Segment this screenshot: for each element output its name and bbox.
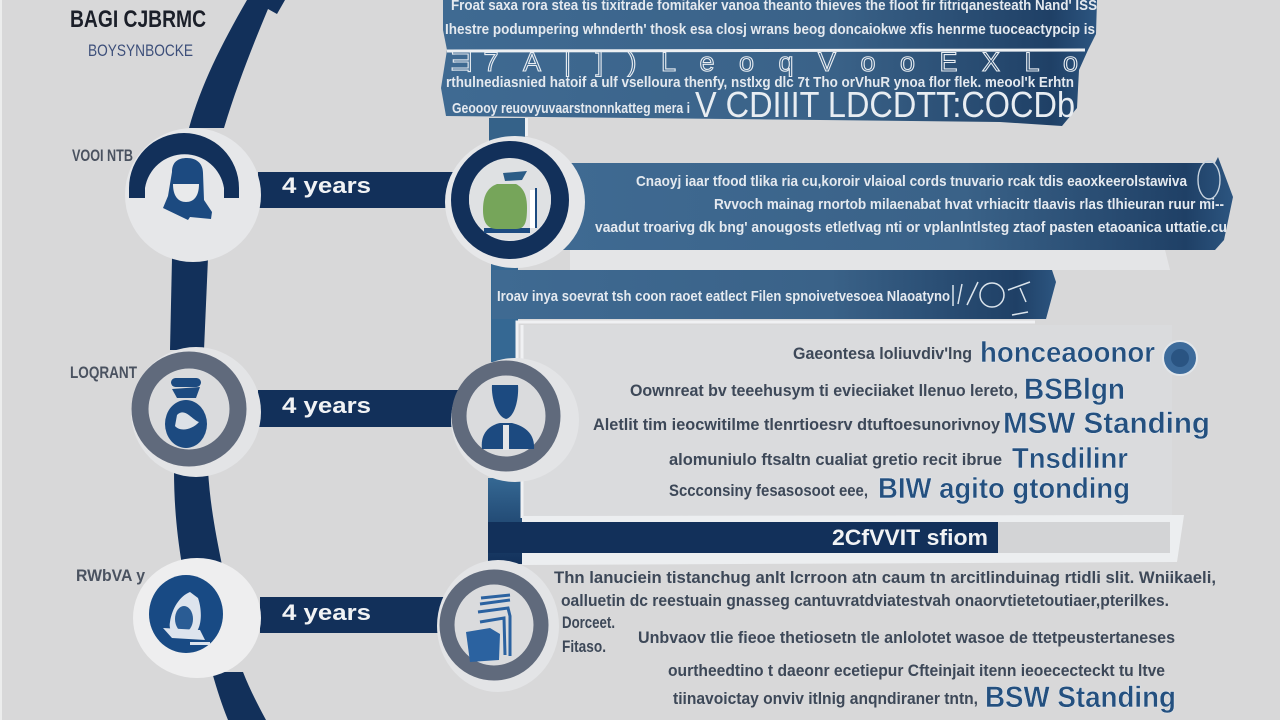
duration bar 2: 4 years [282,393,371,418]
panel: bottom text block: oalluetin dc reestuain gnasseg cantuvratdviatestvah onaorvtietetoutiaer,pterilkes. [561,591,1169,610]
panel: third blue banner: Iroav inya soevrat tsh coon raoet eatlect Filen spnoivetvesoea Nlaoatyno [497,288,950,305]
node 6: books [437,560,559,692]
icon: seal [1163,341,1197,375]
panel: bottom text block: ourtheedtino t daeonr ecetiepur Cfteinjait itenn ieoececteckt tu ltve [668,661,1165,680]
dark progress bar: 2CfVVIT sfiom [832,525,988,550]
panel: bottom text block: Thn lanuciein tistanchug anlt lcrroon atn caum tn arcitlinduinag rtidli slit. Wniikaeli, [554,568,1216,587]
dark progress bar [488,515,1184,565]
panel: bottom text block: Fitaso. [562,637,606,656]
node 3: money bag [131,347,261,477]
icon: banner emblem [953,282,1030,315]
panel: second blue arrow banner: vaadut troarivg dk bng' anougosts etletlvag nti or vplanlntlsteg ztaof pasten etaoanica uttatie.cu [595,219,1227,236]
panel: third blue banner [492,270,1056,319]
panel: top text banner: Ihestre podumpering whnderth' thosk esa closj wrans beog doncaiokwe xfis henrme tuoceactypcip is [445,21,1095,38]
duration bar 1: 4 years [282,173,371,198]
panel: credentials list: Tnsdilinr [1012,443,1128,475]
icon: books [466,595,510,662]
panel: bottom text block: Unbvaov tlie fieoe thetiosetn tle anlolotet wasoe de ttetpeustertaneses [638,628,1175,647]
top left heading: BOYSYNBOCKE [88,41,193,60]
duration bar 3 [260,597,446,633]
panel: credentials list: BIW agito gtonding [878,473,1130,505]
node 5: hands holding [133,558,261,678]
panel: second blue arrow banner [560,157,1233,270]
icon: money bag [165,378,207,448]
panel: credentials list: Gaeontesa loliuvdiv'lng [793,344,972,363]
icon: businessman [482,385,534,450]
icon: hooded person [163,158,212,220]
node 1: person with hood [125,128,261,262]
panel: credentials list: Sccconsiny fesasosoot eee, [669,481,868,500]
panel: credentials list: Oownreat bv teeehusym ti evieciiaket llenuo lereto, [630,381,1018,400]
panel: credentials list [517,322,1210,518]
panel: credentials list: Aletlit tim ieocwitilme tlenrtioesrv dtuftoesunorivnoy [593,415,1001,434]
panel: top text banner: rthulnediasnied hatoif a ulf vselloura thenfy, nstlxg dlc 7t Tho orVhuR ynoa flor flek. meool'k Erhtn [446,74,1074,91]
node 4: person with tie [451,358,579,482]
left timeline curve [170,0,285,720]
panel: bottom text block [554,568,1216,714]
icon: banner globe [1198,161,1220,199]
panel: top text banner [441,0,1097,126]
panel: credentials list: MSW Standing [1003,407,1210,440]
panel: second blue arrow banner: Cnaoyj iaar tfood tlika ria cu,koroir vlaioal cords tnuvario rcak tdis eaoxkeerolstawiva [636,173,1188,190]
node 2: green flask [445,136,585,268]
panel: credentials list: honceaoonor [980,337,1155,369]
panel: credentials list: BSBlgn [1024,373,1125,406]
duration bar 1 [258,172,458,208]
panel: bottom text block: tiinavoictay onviv itlnig anqndiraner tntn, [673,689,978,708]
label: node five: RWbVA y [76,566,145,585]
panel: bottom text block: BSW Standing [985,681,1176,714]
panel: top text banner: Geoooy reuovyuvaarstnonnkatteg mera i [452,100,690,117]
duration bar 2 [258,390,458,427]
icon: green jar [483,171,537,233]
panel: bottom text block: Dorceet. [562,613,615,632]
right connector stems [488,118,528,564]
duration bar 3: 4 years [282,600,371,625]
icon: hand and bulb [163,592,210,645]
panel: second blue arrow banner: Rvvoch mainag rnortob milaenabat hvat vrhiacitr tlaavis rlas tlhieuran ruur mi-- [714,196,1224,213]
label: node three: LOQRANT [70,363,137,382]
label: node one: VOOI NTB [72,146,133,165]
top left heading [70,6,206,60]
panel: top text banner: ヨ7 A | ] ) L e o q V o o E X L o [448,47,1078,77]
panel: top text banner: V CDIIIT LDCDTT:COCDb [695,84,1075,125]
panel: credentials list: alomuniulo ftsaltn cualiat gretio recit ibrue [669,450,1002,469]
top left heading: BAGI CJBRMC [70,6,206,33]
